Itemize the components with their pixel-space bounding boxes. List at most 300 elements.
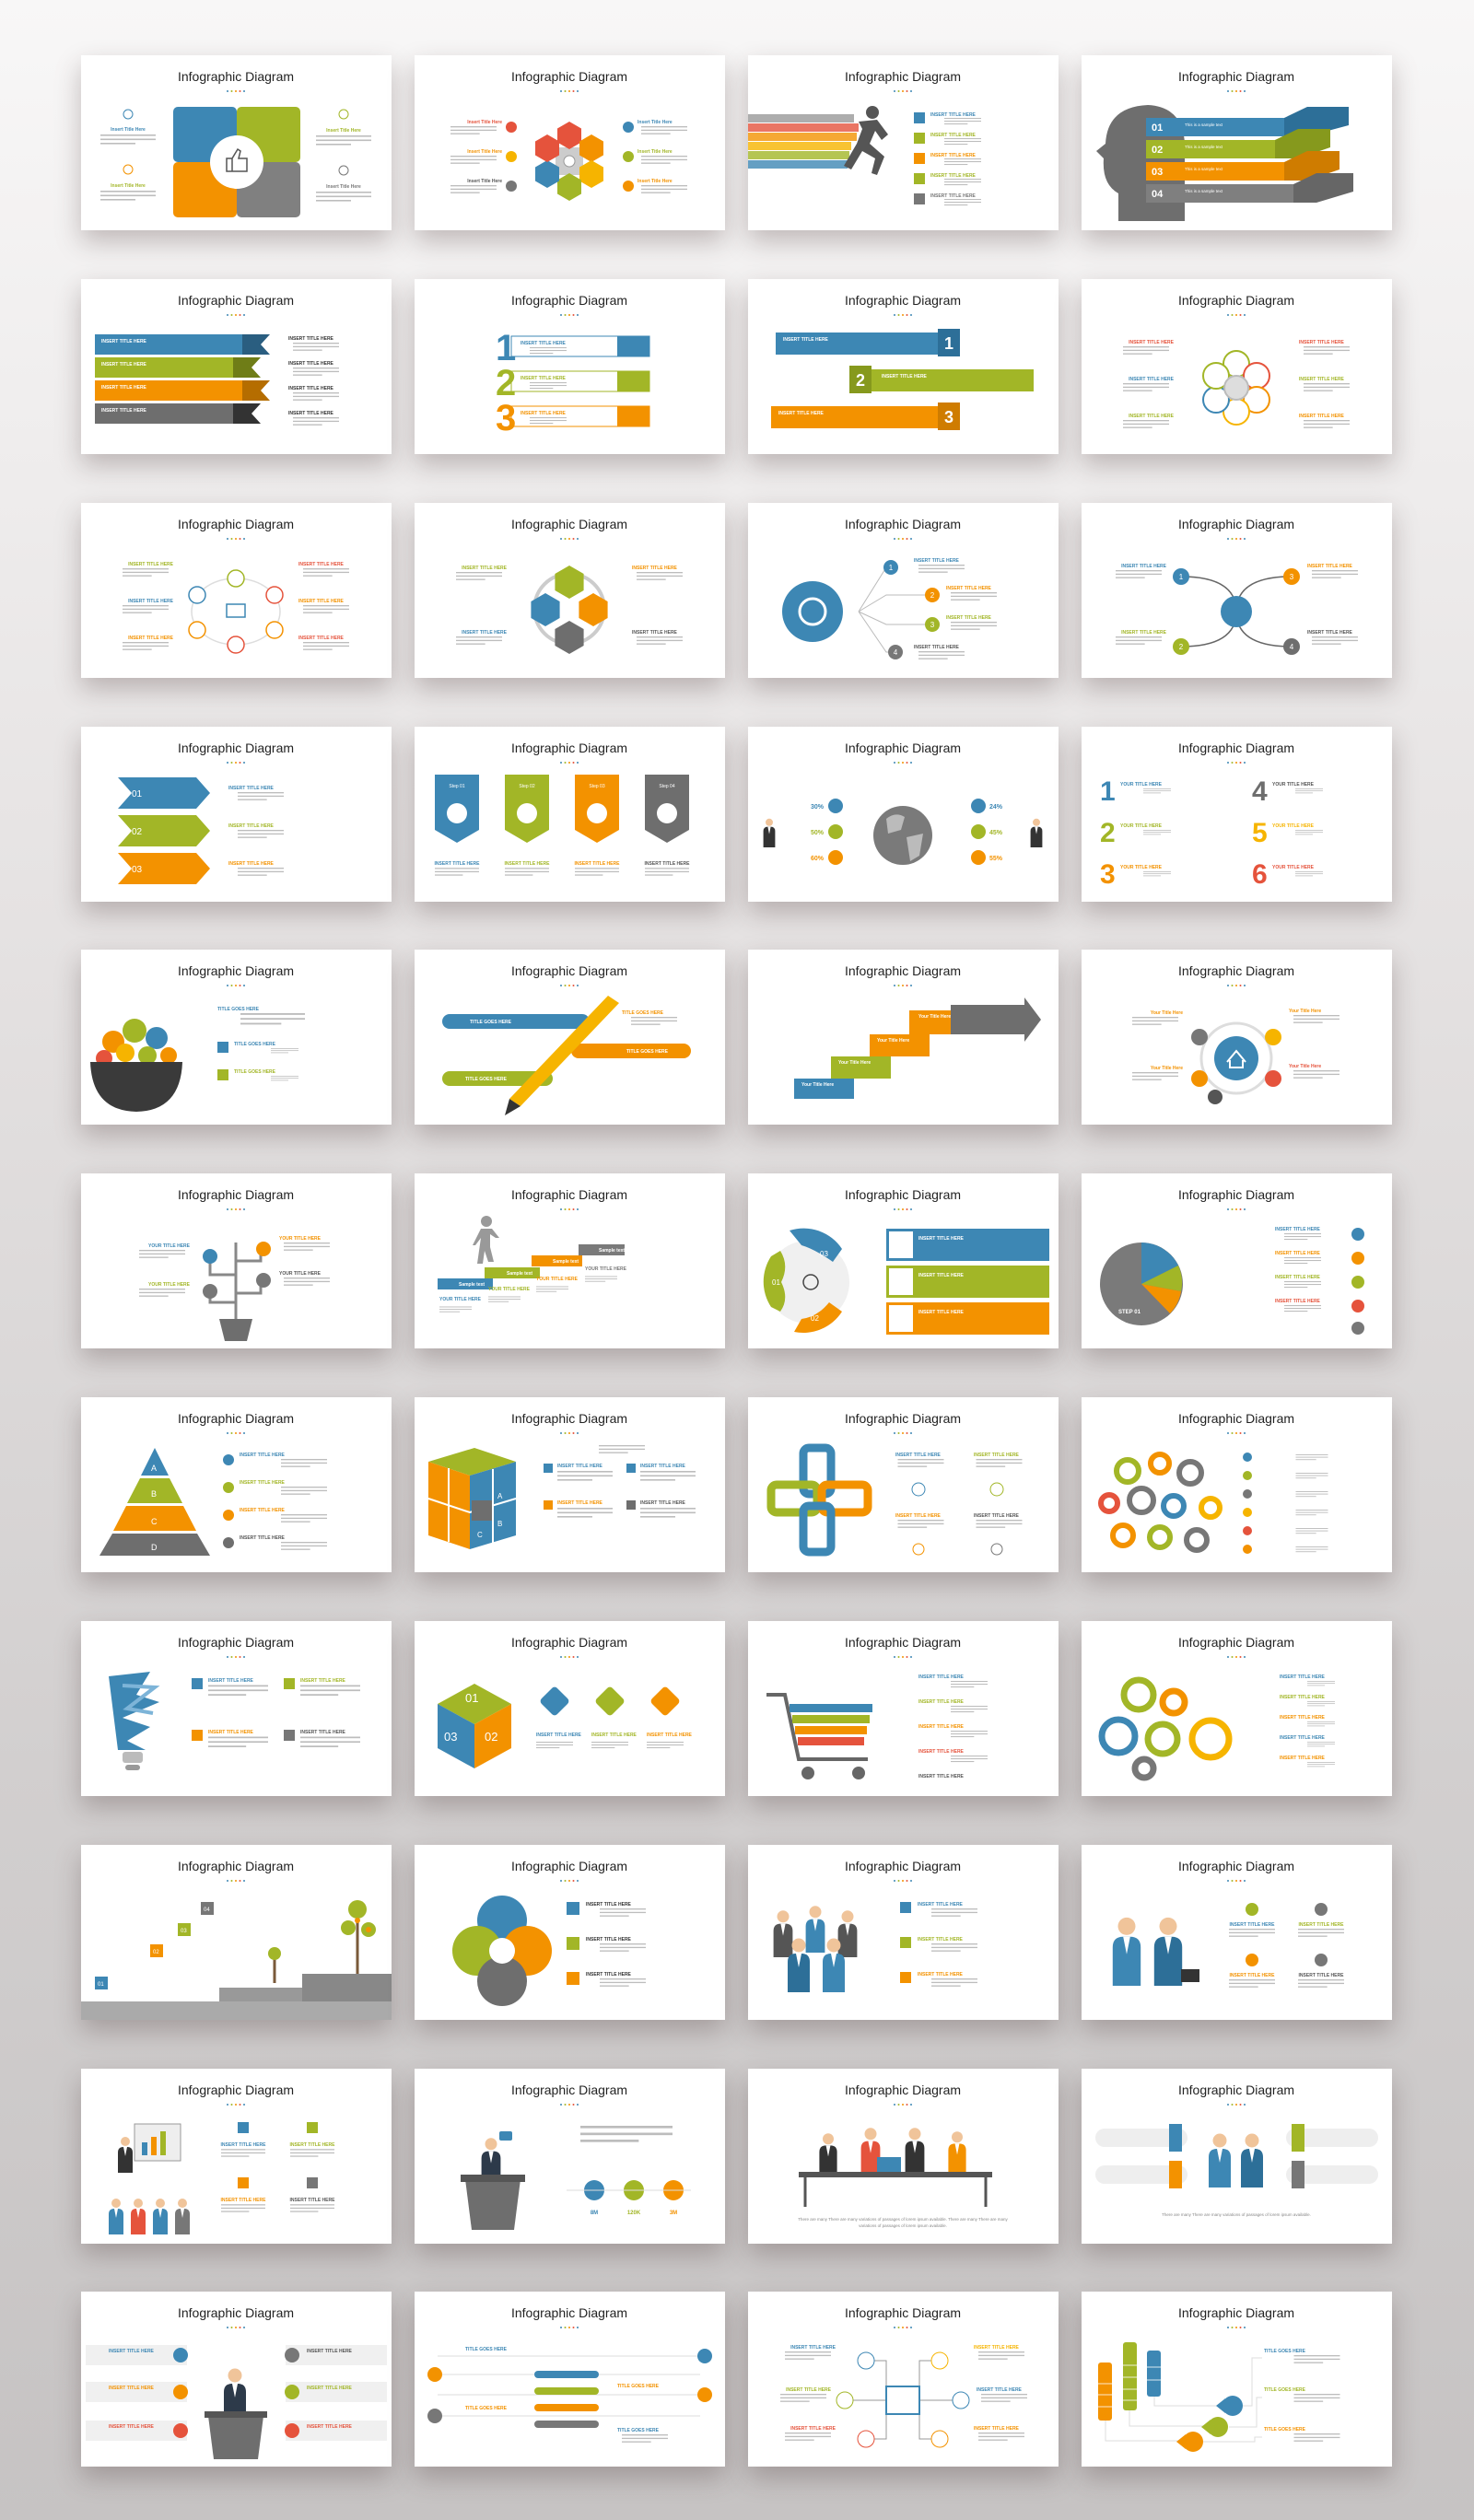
side text <box>1132 1009 1339 1080</box>
panel: slide 2 hexagons <box>415 55 725 230</box>
text grid <box>895 1452 1023 1555</box>
item text <box>1264 2349 1339 2442</box>
banner stack: INSERT TITLE HERE <box>101 362 147 368</box>
six numbered items: 2 <box>1100 818 1116 848</box>
numbered ribbons: 1 <box>496 328 516 368</box>
panel: slide 6 numbers 1-3 <box>415 279 725 454</box>
item text: YOUR TITLE HERE <box>1272 782 1315 788</box>
gear cluster <box>1101 1454 1220 1550</box>
panel: slide 8 flower circles: Infographic Diagram <box>1178 293 1294 308</box>
panel: slide 38 podium stats <box>415 2069 725 2244</box>
panel: slide 12 x connector: Infographic Diagram <box>1178 517 1294 531</box>
panel: slide 3 runner: Infographic Diagram <box>845 69 961 84</box>
side text: INSERT TITLE HERE <box>974 2426 1020 2432</box>
panel: slide 28 gears: Infographic Diagram <box>1178 1411 1294 1426</box>
panel: slide 21 plant pot: Infographic Diagram <box>178 1187 294 1202</box>
hex columns with connectors <box>1098 2342 1262 2452</box>
side text: INSERT TITLE HERE <box>1307 630 1353 636</box>
panel: slide 10 hexagon cycle: Infographic Diagram <box>511 517 627 531</box>
side text: INSERT TITLE HERE <box>1129 377 1175 382</box>
steps and plants: 03 <box>181 1929 187 1934</box>
panel: slide 7 staggered bars: Infographic Diagram <box>845 293 961 308</box>
list text <box>228 786 284 876</box>
panel: slide 36 handshake: Infographic Diagram <box>1178 1859 1294 1873</box>
side text <box>139 1236 330 1297</box>
panel: slide 40 businessmen banners <box>1082 2069 1392 2244</box>
side text: INSERT TITLE HERE <box>1299 377 1345 382</box>
list: INSERT TITLE HERE <box>586 1972 632 1978</box>
side text: INSERT TITLE HERE <box>128 636 174 641</box>
side text: INSERT TITLE HERE <box>298 562 345 567</box>
panel: slide 1 quadrant: Infographic Diagram <box>178 69 294 84</box>
panel: slide 1 quadrant <box>81 55 392 230</box>
side text: INSERT TITLE HERE <box>786 2387 832 2393</box>
pyramid layers: A <box>151 1464 157 1473</box>
panel: slide 15 globe social <box>748 727 1059 902</box>
panel: slide 23 puzzle circle: Infographic Diagram <box>845 1187 961 1202</box>
side text: INSERT TITLE HERE <box>1121 630 1167 636</box>
pie chart <box>1100 1242 1183 1325</box>
panel: slide 5 banners: Infographic Diagram <box>178 293 294 308</box>
side banners: There are many There are many variations of passages of lorem ipsum available. <box>1162 2212 1311 2217</box>
text grid: INSERT TITLE HERE <box>557 1500 603 1506</box>
banner stack: INSERT TITLE HERE <box>101 385 147 391</box>
side items: INSERT TITLE HERE <box>109 2424 155 2430</box>
panel: slide 31 shopping cart <box>748 1621 1059 1796</box>
text and stat circles: 8M <box>591 2211 598 2216</box>
colored cube: B <box>497 1520 502 1528</box>
four tabs: Step 03 <box>589 784 605 789</box>
panel: slide 40 businessmen banners: Infographic Diagram <box>1178 2082 1294 2097</box>
side items: Insert Title Here <box>326 128 361 134</box>
steps: Sample text <box>553 1259 579 1265</box>
panel: slide 29 bulb <box>81 1621 392 1796</box>
colored bars: This is a sample text <box>1185 122 1223 127</box>
side text: INSERT TITLE HERE <box>1307 564 1353 569</box>
item text: YOUR TITLE HERE <box>1272 865 1315 870</box>
labels: TITLE GOES HERE <box>617 2428 660 2433</box>
panel: slide 36 handshake <box>1082 1845 1392 2020</box>
text under tabs <box>435 861 690 876</box>
side text: YOUR TITLE HERE <box>279 1271 322 1277</box>
side text: INSERT TITLE HERE <box>974 2345 1020 2351</box>
panel: slide 30 hex puzzle <box>415 1621 725 1796</box>
steps and plants <box>81 1900 392 2020</box>
list <box>1280 1674 1335 1767</box>
hub and numbered nodes: 4 <box>894 648 898 657</box>
colored bars: This is a sample text <box>1185 167 1223 171</box>
text grid: INSERT TITLE HERE <box>974 1452 1020 1458</box>
four tabs: Step 04 <box>659 784 675 789</box>
side text: INSERT TITLE HERE <box>1299 414 1345 419</box>
panel: slide 11 hub circle <box>748 503 1059 678</box>
numbered list: INSERT TITLE HERE <box>930 193 977 199</box>
quadrant diagram <box>173 107 300 217</box>
side items: Insert Title Here <box>467 179 502 184</box>
colored cube <box>428 1448 516 1549</box>
side text: INSERT TITLE HERE <box>1121 564 1167 569</box>
plant <box>203 1242 271 1341</box>
panel: slide 33 growth steps <box>81 1845 392 2020</box>
hub and numbered nodes: 2 <box>930 591 935 600</box>
text grid: INSERT TITLE HERE <box>895 1513 942 1519</box>
list text: INSERT TITLE HERE <box>228 786 275 791</box>
side text: INSERT TITLE HERE <box>128 599 174 604</box>
side items: INSERT TITLE HERE <box>109 2349 155 2354</box>
side text: INSERT TITLE HERE <box>632 630 678 636</box>
chevron arrows <box>118 777 210 884</box>
panel: slide 32 gear row: Infographic Diagram <box>1178 1635 1294 1650</box>
right text: INSERT TITLE HERE <box>288 386 334 391</box>
items: INSERT TITLE HERE <box>300 1678 346 1684</box>
segmented circle <box>764 1229 849 1333</box>
steps and plants: 01 <box>98 1982 104 1988</box>
list with icons: INSERT TITLE HERE <box>1275 1299 1321 1304</box>
panel: slide 6 numbers 1-3: Infographic Diagram <box>511 293 627 308</box>
six numbered items: 3 <box>1100 859 1116 890</box>
list text: INSERT TITLE HERE <box>228 861 275 867</box>
colored bars: 01 <box>1152 122 1163 134</box>
puzzle icons <box>536 1686 693 1748</box>
panel: slide 19 arrow staircase: Infographic Diagram <box>845 963 961 978</box>
banner stack: INSERT TITLE HERE <box>101 339 147 344</box>
puzzle icons: INSERT TITLE HERE <box>536 1732 582 1738</box>
people and social circles <box>764 799 1042 865</box>
businessmen <box>1209 2133 1263 2188</box>
panel: slide 41 podium items: Infographic Diagram <box>178 2305 294 2320</box>
list: INSERT TITLE HERE <box>918 1699 965 1705</box>
colored bars: This is a sample text <box>1185 145 1223 149</box>
side text <box>456 566 683 645</box>
four tabs <box>435 775 689 843</box>
panel: slide 20 house hub: Infographic Diagram <box>1178 963 1294 978</box>
panel: slide 26 cube: Infographic Diagram <box>511 1411 627 1426</box>
head silhouette <box>1096 105 1185 221</box>
panel: slide 2 hexagons: Infographic Diagram <box>511 69 627 84</box>
item text: YOUR TITLE HERE <box>1120 782 1163 788</box>
side text: INSERT TITLE HERE <box>790 2426 836 2432</box>
six numbered items <box>1100 776 1268 890</box>
list: INSERT TITLE HERE <box>918 1972 964 1978</box>
list panels: INSERT TITLE HERE <box>918 1236 965 1242</box>
four tabs: Step 01 <box>449 784 465 789</box>
people and social circles: 55% <box>989 856 1003 862</box>
banner stack: INSERT TITLE HERE <box>101 408 147 414</box>
steps and plants: 02 <box>153 1950 159 1955</box>
stripes and runner <box>748 106 888 175</box>
list text <box>217 1007 305 1080</box>
list <box>223 1452 327 1550</box>
step text: YOUR TITLE HERE <box>536 1277 579 1282</box>
six numbered items: 5 <box>1252 818 1268 848</box>
numbered ribbons: INSERT TITLE HERE <box>521 341 567 346</box>
bars: INSERT TITLE HERE <box>882 374 928 379</box>
panel: slide 4 head bars: Infographic Diagram <box>1178 69 1294 84</box>
pie chart: STEP 01 <box>1118 1310 1141 1315</box>
panel: slide 29 bulb: Infographic Diagram <box>178 1635 294 1650</box>
pencil and bars: TITLE GOES HERE <box>465 1077 508 1082</box>
list: INSERT TITLE HERE <box>918 1937 964 1942</box>
panel: slide 25 pyramid <box>81 1397 392 1572</box>
x diagram: 3 <box>1290 573 1294 581</box>
labels: TITLE GOES HERE <box>465 2347 508 2352</box>
split hexagon: 02 <box>485 1730 497 1744</box>
icon grid <box>1229 1903 1344 1988</box>
group of people <box>774 1906 857 1992</box>
pencil and bars <box>442 996 691 1115</box>
side text <box>123 562 349 650</box>
list with icons: INSERT TITLE HERE <box>1275 1227 1321 1232</box>
colored cube: C <box>477 1531 483 1539</box>
text grid: INSERT TITLE HERE <box>895 1452 942 1458</box>
side text: YOUR TITLE HERE <box>279 1236 322 1242</box>
panel: slide 24 pie <box>1082 1173 1392 1348</box>
icon grid: INSERT TITLE HERE <box>1299 1973 1344 1978</box>
list panels <box>886 1229 1049 1335</box>
steps: Sample text <box>599 1248 625 1254</box>
numbered ribbons: INSERT TITLE HERE <box>521 376 567 381</box>
icon grid: INSERT TITLE HERE <box>290 2198 335 2203</box>
items: INSERT TITLE HERE <box>208 1730 254 1735</box>
colored bars: 04 <box>1152 189 1164 200</box>
x diagram: 1 <box>1179 573 1184 581</box>
bars: INSERT TITLE HERE <box>778 411 825 416</box>
people and social circles: 30% <box>811 804 825 811</box>
panel: slide 8 flower circles <box>1082 279 1392 454</box>
text grid: INSERT TITLE HERE <box>640 1500 686 1506</box>
gears <box>1102 1680 1229 1778</box>
panel: slide 42 timeline: Infographic Diagram <box>511 2305 627 2320</box>
side text: Your Title Here <box>1151 1010 1183 1016</box>
panel: slide 34 overlapping circles <box>415 1845 725 2020</box>
two businessmen <box>1113 1918 1199 1986</box>
list text: INSERT TITLE HERE <box>228 823 275 829</box>
list panels: INSERT TITLE HERE <box>918 1273 965 1278</box>
segmented circle: 03 <box>820 1250 828 1258</box>
side text: TITLE GOES HERE <box>622 1010 664 1016</box>
steps <box>438 1244 625 1289</box>
icon grid: INSERT TITLE HERE <box>221 2198 266 2203</box>
list: INSERT TITLE HERE <box>918 1902 964 1908</box>
step text: YOUR TITLE HERE <box>585 1266 627 1272</box>
labels <box>465 2347 668 2443</box>
numbered list: INSERT TITLE HERE <box>930 133 977 138</box>
panel: slide 18 pencil <box>415 950 725 1125</box>
panel: slide 44 hex columns <box>1082 2292 1392 2467</box>
icon grid: INSERT TITLE HERE <box>1299 1922 1344 1928</box>
caption <box>798 2217 1009 2228</box>
speaker at podium <box>461 2131 525 2230</box>
side items: Insert Title Here <box>638 120 673 125</box>
side text: INSERT TITLE HERE <box>462 566 508 571</box>
panel: slide 32 gear row <box>1082 1621 1392 1796</box>
hub and numbered nodes <box>782 560 940 659</box>
six numbered items: 4 <box>1252 776 1268 807</box>
six numbered items: 6 <box>1252 859 1268 890</box>
list: INSERT TITLE HERE <box>1280 1674 1326 1680</box>
bars <box>771 329 1034 430</box>
panel: slide 17 gear bowl <box>81 950 392 1125</box>
panel: slide 13 chevrons: Infographic Diagram <box>178 741 294 755</box>
panel: slide 39 team at desk: Infographic Diagram <box>845 2082 961 2097</box>
segmented circle: 02 <box>811 1314 819 1323</box>
side text: YOUR TITLE HERE <box>148 1282 191 1288</box>
labels: TITLE GOES HERE <box>617 2384 660 2389</box>
side text: INSERT TITLE HERE <box>128 562 174 567</box>
x diagram <box>1173 568 1300 655</box>
side text: Your Title Here <box>1289 1009 1321 1014</box>
list <box>567 1902 646 1987</box>
numbered list <box>914 112 981 205</box>
panel: slide 23 puzzle circle <box>748 1173 1059 1348</box>
panel: slide 9 icon ring <box>81 503 392 678</box>
steps and plants: 04 <box>204 1908 210 1913</box>
ascending blocks: Your Title Here <box>838 1060 871 1066</box>
list text: TITLE GOES HERE <box>234 1069 276 1075</box>
list text <box>914 558 997 659</box>
pyramid layers: C <box>151 1517 158 1526</box>
panel: slide 24 pie: Infographic Diagram <box>1178 1187 1294 1202</box>
colored bars: This is a sample text <box>1185 189 1223 193</box>
panel: slide 39 team at desk <box>748 2069 1059 2244</box>
numbered ribbons: 2 <box>496 363 516 403</box>
list: INSERT TITLE HERE <box>586 1937 632 1942</box>
panel: slide 31 shopping cart: Infographic Diagram <box>845 1635 961 1650</box>
bowl with gears <box>90 1019 182 1112</box>
numbered list: INSERT TITLE HERE <box>930 112 977 118</box>
panel: slide 5 banners <box>81 279 392 454</box>
list with icons <box>1275 1227 1364 1335</box>
side items <box>100 110 371 202</box>
panel: slide 35 people group: Infographic Diagram <box>845 1859 961 1873</box>
four circles <box>452 1896 552 2006</box>
list text: TITLE GOES HERE <box>234 1042 276 1047</box>
numbered ribbons <box>496 328 649 438</box>
panel: slide 34 overlapping circles: Infographic Diagram <box>511 1859 627 1873</box>
people and social circles: 24% <box>989 804 1003 811</box>
network diagram <box>836 2352 969 2447</box>
icon grid: INSERT TITLE HERE <box>1230 1973 1275 1978</box>
icon grid: INSERT TITLE HERE <box>290 2142 335 2148</box>
panel: slide 37 presenter: Infographic Diagram <box>178 2082 294 2097</box>
caption: There are many There are many variations of passages of lorem ipsum available. There are many There are many <box>798 2217 1009 2222</box>
panel: slide 26 cube <box>415 1397 725 1572</box>
numbered list: INSERT TITLE HERE <box>930 173 977 179</box>
list with icons: INSERT TITLE HERE <box>1275 1275 1321 1280</box>
ascending blocks: Your Title Here <box>801 1082 834 1088</box>
right text: INSERT TITLE HERE <box>288 411 334 416</box>
hub and numbered nodes: 3 <box>930 621 935 629</box>
ascending blocks <box>794 998 1041 1099</box>
side text: INSERT TITLE HERE <box>632 566 678 571</box>
ascending blocks: Your Title Here <box>877 1038 909 1044</box>
puzzle icons: INSERT TITLE HERE <box>591 1732 638 1738</box>
panel: slide 13 chevrons <box>81 727 392 902</box>
panel: slide 30 hex puzzle: Infographic Diagram <box>511 1635 627 1650</box>
step text: YOUR TITLE HERE <box>439 1297 482 1302</box>
panel: slide 27 chain: Infographic Diagram <box>845 1411 961 1426</box>
list <box>900 1902 977 1987</box>
chain links <box>771 1448 868 1552</box>
pyramid layers: B <box>151 1489 157 1499</box>
timeline bars <box>427 2349 712 2428</box>
ring of icons <box>189 570 283 653</box>
speaker <box>205 2369 267 2459</box>
side text: INSERT TITLE HERE <box>298 636 345 641</box>
numbered ribbons: 3 <box>496 398 516 438</box>
panel: slide 44 hex columns: Infographic Diagram <box>1178 2305 1294 2320</box>
panel: slide 33 growth steps: Infographic Diagram <box>178 1859 294 1873</box>
side text: INSERT TITLE HERE <box>1299 340 1345 345</box>
numbered list: INSERT TITLE HERE <box>930 153 977 158</box>
panel: slide 43 network <box>748 2292 1059 2467</box>
side items: Insert Title Here <box>638 179 673 184</box>
side items: INSERT TITLE HERE <box>307 2349 353 2354</box>
items <box>192 1678 360 1747</box>
list text: INSERT TITLE HERE <box>914 645 960 650</box>
side items: Insert Title Here <box>111 183 146 189</box>
side text <box>622 1010 677 1025</box>
colored cube: A <box>497 1492 503 1500</box>
list text: INSERT TITLE HERE <box>946 586 992 591</box>
item text: YOUR TITLE HERE <box>1272 823 1315 829</box>
colored bars <box>1146 107 1353 203</box>
ribbon bulb <box>109 1672 159 1770</box>
steps: Sample text <box>459 1282 485 1288</box>
side text: Your Title Here <box>1151 1066 1183 1071</box>
walking person <box>473 1216 499 1264</box>
numbered list <box>1243 1452 1328 1554</box>
people at desk <box>799 2128 992 2207</box>
step text: YOUR TITLE HERE <box>488 1287 531 1292</box>
panel: slide 42 timeline <box>415 2292 725 2467</box>
side text: Your Title Here <box>1289 1064 1321 1069</box>
item text <box>1120 782 1323 876</box>
step text <box>439 1266 627 1312</box>
icon grid: INSERT TITLE HERE <box>1230 1922 1275 1928</box>
list text: INSERT TITLE HERE <box>914 558 960 564</box>
side items: Insert Title Here <box>326 184 361 190</box>
list: INSERT TITLE HERE <box>240 1480 286 1486</box>
item text: TITLE GOES HERE <box>1264 2349 1306 2354</box>
chevron arrows: 03 <box>132 865 143 875</box>
side text: INSERT TITLE HERE <box>1129 340 1175 345</box>
icon grid: INSERT TITLE HERE <box>221 2142 266 2148</box>
side items: INSERT TITLE HERE <box>109 2386 155 2391</box>
hub <box>1191 1023 1281 1104</box>
ascending blocks: Your Title Here <box>918 1014 951 1020</box>
text and stat circles: 3M <box>670 2211 677 2216</box>
panel: slide 4 head bars <box>1082 55 1392 230</box>
text under tabs: INSERT TITLE HERE <box>645 861 690 867</box>
side text: INSERT TITLE HERE <box>1129 414 1175 419</box>
list: INSERT TITLE HERE <box>240 1535 286 1541</box>
panel: slide 11 hub circle: Infographic Diagram <box>845 517 961 531</box>
side items <box>86 2345 387 2441</box>
bars: 3 <box>944 408 953 426</box>
panel: slide 38 podium stats: Infographic Diagram <box>511 2082 627 2097</box>
list: INSERT TITLE HERE <box>918 1724 965 1730</box>
icon grid <box>221 2122 335 2212</box>
split hexagon <box>438 1684 511 1768</box>
colored bars: 03 <box>1152 167 1163 178</box>
item text: YOUR TITLE HERE <box>1120 823 1163 829</box>
steps: Sample text <box>507 1271 532 1277</box>
text grid: INSERT TITLE HERE <box>974 1513 1020 1519</box>
globe <box>873 806 932 865</box>
split hexagon: 03 <box>444 1730 457 1744</box>
list with icons: INSERT TITLE HERE <box>1275 1251 1321 1256</box>
